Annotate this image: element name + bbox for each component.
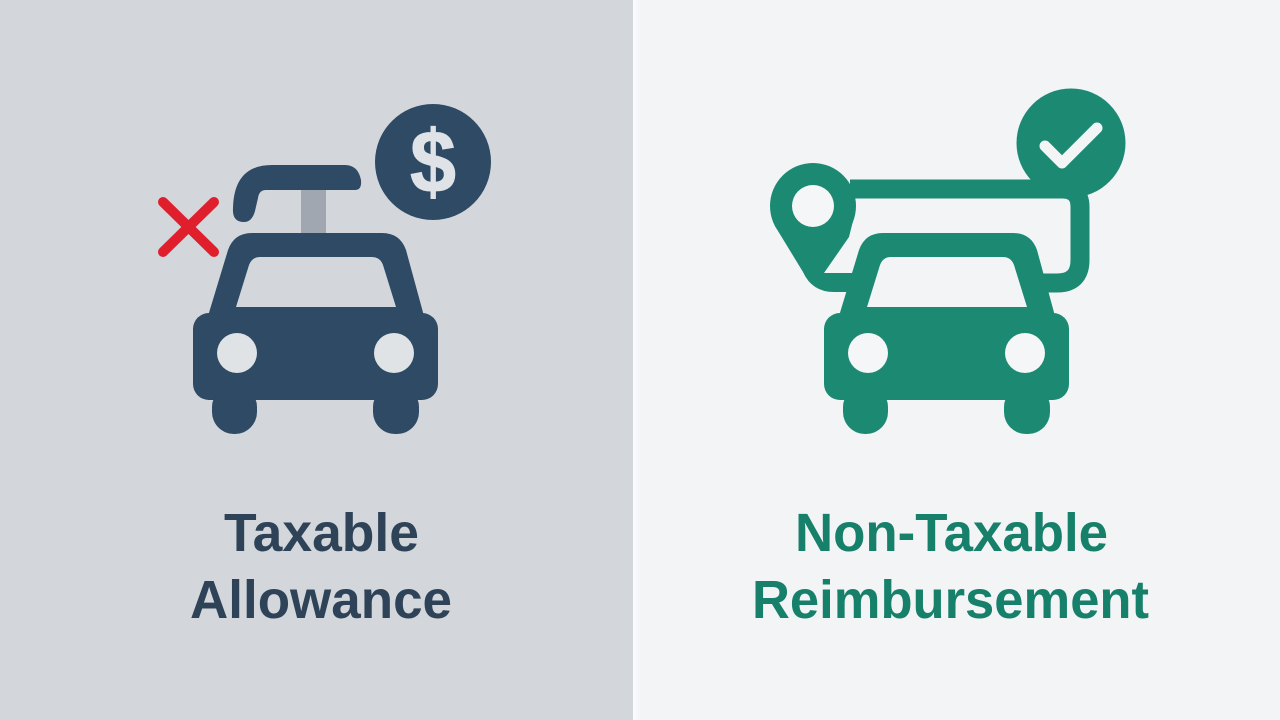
panel: taxable allowance: [0, 0, 633, 720]
heading: non-taxable reimbursement: [752, 503, 1149, 630]
icon: check badge: [1016, 88, 1126, 198]
heading: non-taxable reimbursement: Non-Taxable: [795, 503, 1108, 563]
heading: taxable allowance: [190, 503, 452, 630]
icon: dollar coin: [375, 104, 491, 220]
heading: taxable allowance: Allowance: [190, 570, 452, 630]
icon: route line: [850, 189, 1080, 283]
icon: roof rack handle: [233, 165, 361, 235]
icon: dollar coin: $: [410, 112, 456, 211]
icon: navy car: [193, 233, 438, 434]
icon: location pin: [770, 163, 860, 292]
heading: non-taxable reimbursement: Reimbursement: [752, 570, 1149, 630]
icon: green car: [824, 233, 1069, 434]
icon: red cross: [163, 202, 214, 252]
panel: non-taxable reimbursement: [633, 0, 1280, 720]
heading: taxable allowance: Taxable: [224, 503, 419, 563]
